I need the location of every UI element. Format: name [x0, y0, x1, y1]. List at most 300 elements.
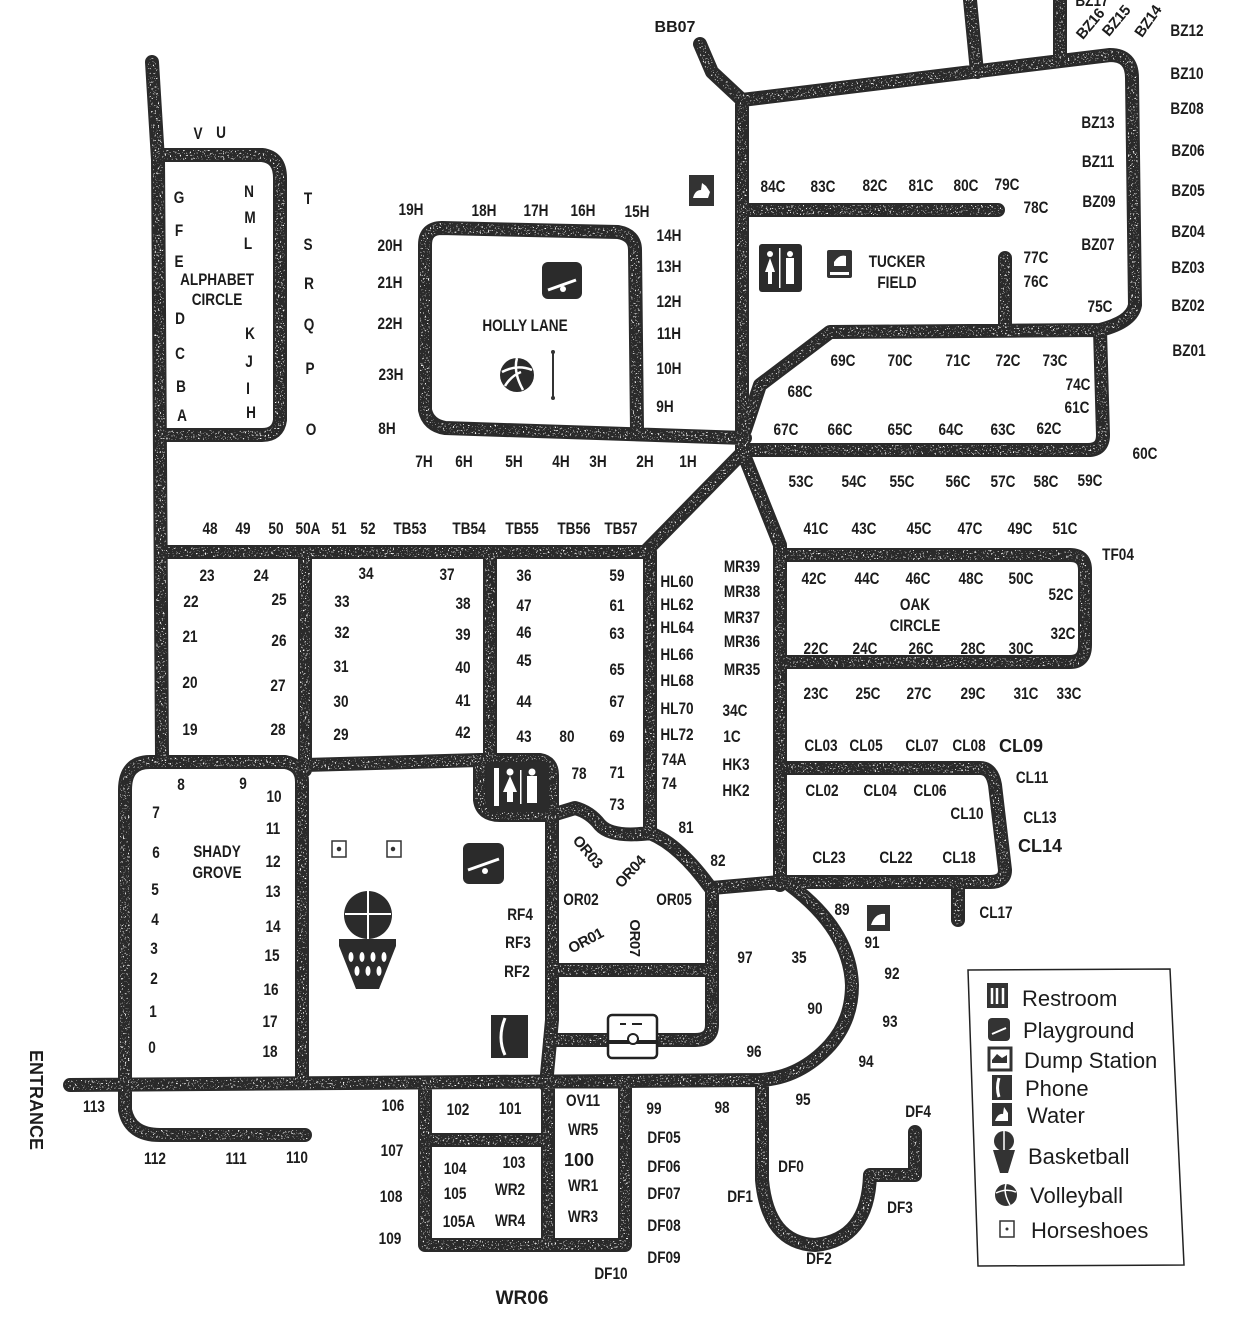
legend: playground: Playground [1023, 1018, 1134, 1043]
HL and MR labels: 82 [710, 852, 726, 870]
south labels: 111 [225, 1150, 247, 1168]
CL labels: CL05 [849, 737, 883, 755]
central row labels: 46 [516, 624, 532, 642]
top site labels: BZ04 [1171, 223, 1205, 241]
south labels: 100 [564, 1150, 594, 1170]
HL and MR labels: 1C [723, 728, 741, 746]
Holly Lane labels: 7H [415, 453, 433, 471]
Tucker Field labels: 82C [863, 177, 887, 195]
Alphabet Circle labels: ALPHABET [180, 271, 255, 289]
top site labels: BZ14 [1131, 1, 1166, 41]
east loop labels: 95 [795, 1091, 811, 1109]
Holly Lane labels: 6H [455, 453, 473, 471]
icon: water east [867, 905, 890, 931]
Shady Grove labels: 18 [262, 1043, 278, 1061]
CL labels: CL18 [942, 849, 976, 867]
Oak Circle labels: 33C [1057, 685, 1081, 703]
south labels: DF3 [887, 1199, 913, 1217]
Holly Lane labels: 14H [657, 227, 681, 245]
south labels: DF07 [647, 1185, 681, 1203]
top site labels [655, 0, 1206, 360]
Oak Circle labels: 32C [1051, 625, 1075, 643]
CL labels: CL03 [804, 737, 838, 755]
Tucker Field labels: FIELD [877, 274, 917, 292]
HL and MR labels: 81 [678, 819, 694, 837]
loop C labels: 59C [1078, 472, 1102, 490]
CL labels: CL10 [950, 805, 984, 823]
Alphabet Circle labels: E [174, 253, 184, 271]
central row labels: 80 [559, 728, 575, 746]
OR and RF labels: OR07 [626, 919, 643, 957]
Shady Grove labels: 7 [152, 804, 160, 822]
loop C labels: 53C [789, 473, 813, 491]
loop C labels: 71C [946, 352, 970, 370]
Alphabet Circle labels: N [244, 183, 254, 201]
CL labels: CL04 [863, 782, 897, 800]
CL labels: CL09 [999, 736, 1043, 756]
Holly Lane labels: 19H [399, 201, 423, 219]
central row labels: 42 [455, 724, 471, 742]
east loop labels: 93 [882, 1013, 898, 1031]
Holly Lane labels: 21H [378, 274, 402, 292]
central row labels: 47 [516, 597, 532, 615]
HL and MR labels: 74 [661, 775, 677, 793]
loop C labels: 62C [1037, 420, 1061, 438]
legend: dump station: Dump Station [1024, 1048, 1157, 1073]
Alphabet Circle labels: T [304, 190, 313, 208]
Holly Lane labels: 16H [571, 202, 595, 220]
Alphabet Circle labels: S [303, 236, 313, 254]
Oak Circle labels: 30C [1009, 640, 1033, 658]
central row labels: 51 [331, 520, 347, 538]
Holly Lane labels: 18H [472, 202, 496, 220]
loop C labels: 63C [991, 421, 1015, 439]
CL labels: CL08 [952, 737, 986, 755]
south labels: WR2 [495, 1181, 525, 1199]
Alphabet Circle labels: H [246, 404, 256, 422]
icon: volleyball and net [500, 350, 555, 400]
Shady Grove labels: 0 [148, 1039, 156, 1057]
central row labels: 67 [609, 693, 625, 711]
legend: phone: Phone [1025, 1076, 1089, 1101]
Shady Grove labels: 10 [266, 788, 282, 806]
south labels: WR3 [568, 1208, 598, 1226]
south labels: 99 [646, 1100, 662, 1118]
icon: dump station central [608, 1015, 657, 1058]
HL and MR labels: HL64 [660, 619, 694, 637]
icon: phone central [491, 1015, 528, 1058]
Alphabet Circle labels: CIRCLE [192, 291, 242, 309]
loop C labels: 55C [890, 473, 914, 491]
loop C labels: 56C [946, 473, 970, 491]
central row labels: 22 [183, 593, 199, 611]
central row labels: 38 [455, 595, 471, 613]
central row labels: 73 [609, 796, 625, 814]
Shady Grove labels: 6 [152, 844, 160, 862]
Shady Grove labels: 3 [150, 940, 158, 958]
loop C labels: 73C [1043, 352, 1067, 370]
east loop labels: 89 [834, 901, 850, 919]
Tucker Field labels: 76C [1024, 273, 1048, 291]
CL labels: CL22 [879, 849, 913, 867]
central row labels: 34 [358, 565, 374, 583]
central row labels: 26 [271, 632, 287, 650]
Oak Circle labels: 47C [958, 520, 982, 538]
south labels: OV11 [566, 1092, 600, 1110]
Holly Lane labels: 8H [378, 420, 396, 438]
OR and RF labels: OR03 [569, 832, 606, 872]
south labels: 108 [380, 1188, 403, 1206]
central row labels: 48 [202, 520, 218, 538]
south labels: 105 [444, 1185, 467, 1203]
central row labels: 43 [516, 728, 532, 746]
Holly Lane labels: 2H [636, 453, 654, 471]
loop C labels: 65C [888, 421, 912, 439]
Alphabet Circle labels: C [175, 345, 185, 363]
central row labels: 39 [455, 626, 471, 644]
HL and MR labels: MR39 [724, 558, 760, 576]
legend [968, 969, 1184, 1266]
HL and MR labels: HL68 [660, 672, 694, 690]
Shady Grove labels [148, 775, 282, 1061]
Shady Grove labels: 2 [150, 970, 158, 988]
Holly Lane labels: 3H [589, 453, 607, 471]
central row labels: 59 [609, 567, 625, 585]
Oak Circle labels: 51C [1053, 520, 1077, 538]
central row labels: 69 [609, 728, 625, 746]
Oak Circle labels: 44C [855, 570, 879, 588]
OR and RF labels: OR01 [565, 925, 606, 957]
loop C labels: 68C [788, 383, 812, 401]
Alphabet Circle labels: F [175, 222, 183, 240]
Oak Circle labels: 52C [1049, 586, 1073, 604]
central row labels: 49 [235, 520, 251, 538]
icon: water north [689, 175, 714, 206]
HL and MR labels: 34C [723, 702, 747, 720]
Oak Circle labels: 45C [907, 520, 931, 538]
south labels: WR06 [496, 1288, 548, 1309]
Oak Circle labels: 24C [853, 640, 877, 658]
legend: restroom: Restroom [1022, 986, 1117, 1011]
icon: dump station Tucker Field [827, 250, 852, 278]
loop C labels: 74C [1066, 376, 1090, 394]
south labels: DF05 [647, 1129, 681, 1147]
east loop labels: 90 [807, 1000, 823, 1018]
east loop labels: 97 [737, 949, 753, 967]
south labels [26, 1050, 931, 1309]
Oak Circle labels: 43C [852, 520, 876, 538]
Oak Circle labels: 42C [802, 570, 826, 588]
Holly Lane labels: 22H [378, 315, 402, 333]
south labels: 101 [499, 1100, 522, 1118]
Holly Lane labels: 13H [657, 258, 681, 276]
Shady Grove labels: 12 [265, 853, 281, 871]
east loop labels: 94 [858, 1053, 874, 1071]
Holly Lane labels: 15H [625, 203, 649, 221]
Alphabet Circle labels: U [216, 124, 226, 142]
loop C labels [774, 352, 1157, 491]
Tucker Field labels: 84C [761, 178, 785, 196]
icon: restroom Tucker Field [759, 244, 802, 292]
Shady Grove labels: 16 [263, 981, 279, 999]
Holly Lane labels: 1H [679, 453, 697, 471]
Oak Circle labels: 46C [906, 570, 930, 588]
central row labels: 23 [199, 567, 215, 585]
central row labels: TB56 [557, 520, 591, 538]
HL and MR labels: HL70 [660, 700, 694, 718]
central row labels: 63 [609, 625, 625, 643]
Oak Circle labels: 49C [1008, 520, 1032, 538]
central row labels: 52 [360, 520, 376, 538]
Shady Grove labels: 17 [262, 1013, 278, 1031]
central row labels: 61 [609, 597, 625, 615]
HL and MR labels: MR35 [724, 661, 761, 679]
Oak Circle labels: 29C [961, 685, 985, 703]
Oak Circle labels: 25C [856, 685, 880, 703]
Alphabet Circle labels: L [244, 235, 252, 253]
Holly Lane labels: 9H [656, 398, 674, 416]
central row labels: 20 [182, 674, 198, 692]
Tucker Field labels: 83C [811, 178, 835, 196]
loop C labels: 69C [831, 352, 855, 370]
Holly Lane labels [378, 201, 697, 471]
icon: playground central [463, 843, 504, 884]
legend: restroom [987, 983, 1117, 1011]
loop C labels: 58C [1034, 473, 1058, 491]
south labels: DF2 [806, 1250, 832, 1268]
Tucker Field labels: 81C [909, 177, 933, 195]
Oak Circle labels: OAK [900, 596, 930, 614]
south labels: DF09 [647, 1249, 681, 1267]
south labels: 104 [444, 1160, 467, 1178]
Alphabet Circle labels: P [305, 360, 315, 378]
south labels: 107 [381, 1142, 403, 1160]
Shady Grove labels: 4 [151, 911, 159, 929]
Holly Lane labels: 12H [657, 293, 681, 311]
Holly Lane labels: 11H [657, 325, 681, 343]
HL and MR labels: 74A [662, 751, 686, 769]
OR and RF labels: RF3 [505, 934, 531, 952]
CL labels: CL11 [1016, 769, 1049, 787]
top site labels: BZ09 [1082, 193, 1116, 211]
loop C labels: 54C [842, 473, 866, 491]
south labels: WR1 [568, 1177, 599, 1195]
south labels: 112 [144, 1150, 166, 1168]
top site labels: BZ06 [1171, 142, 1205, 160]
central row labels: 78 [571, 765, 587, 783]
central row labels: 50A [296, 520, 320, 538]
Alphabet Circle labels: M [244, 209, 256, 227]
top site labels: BB07 [655, 19, 696, 36]
top site labels: BZ01 [1172, 342, 1206, 360]
Oak Circle labels: 26C [909, 640, 933, 658]
Tucker Field labels: 79C [995, 176, 1019, 194]
HL and MR labels: HL72 [660, 726, 694, 744]
central row labels: 37 [439, 566, 455, 584]
Alphabet Circle labels: K [245, 325, 255, 343]
south labels: 105A [443, 1213, 475, 1231]
Oak Circle labels: 22C [804, 640, 828, 658]
Shady Grove labels: GROVE [192, 864, 242, 882]
legend: volleyball: Volleyball [1030, 1183, 1123, 1208]
loop C labels: 70C [888, 352, 912, 370]
central row labels: 29 [333, 726, 349, 744]
central row labels: TB53 [393, 520, 427, 538]
Oak Circle labels: 41C [804, 520, 828, 538]
legend: basketball: Basketball [1028, 1144, 1130, 1169]
south labels: DF10 [594, 1265, 628, 1283]
Alphabet Circle labels: I [246, 380, 250, 398]
OR and RF labels [504, 832, 692, 981]
Oak Circle labels: 27C [907, 685, 931, 703]
HL and MR labels: HK2 [722, 782, 750, 800]
legend: basketball [993, 1131, 1130, 1173]
south labels: DF4 [905, 1103, 931, 1121]
south labels: 113 [83, 1098, 105, 1116]
south labels: 109 [379, 1230, 401, 1248]
central row labels: 45 [516, 652, 532, 670]
top site labels: 75C [1088, 298, 1112, 316]
icon: basketball hoop [339, 891, 396, 989]
Oak Circle labels: 31C [1014, 685, 1038, 703]
central row labels: 50 [268, 520, 284, 538]
Tucker Field labels: 77C [1024, 249, 1048, 267]
Alphabet Circle labels: R [304, 275, 314, 293]
Alphabet Circle labels: B [176, 378, 186, 396]
Shady Grove labels: 11 [266, 820, 281, 838]
CL labels: CL23 [812, 849, 846, 867]
Alphabet Circle labels: D [175, 310, 185, 328]
HL and MR labels: HL66 [660, 646, 694, 664]
central row labels: 24 [253, 567, 269, 585]
central row labels [182, 520, 638, 814]
central row labels: 36 [516, 567, 532, 585]
central row labels: 28 [270, 721, 286, 739]
Shady Grove labels: 5 [151, 881, 159, 899]
loop C labels: 57C [991, 473, 1015, 491]
south labels: ENTRANCE [26, 1050, 46, 1150]
HL and MR labels [660, 558, 761, 870]
Holly Lane labels: 5H [505, 453, 523, 471]
south labels: 110 [286, 1149, 308, 1167]
Tucker Field labels: 80C [954, 177, 978, 195]
Holly Lane labels: 17H [524, 202, 548, 220]
icon: restroom central [487, 762, 549, 812]
central row labels: 65 [609, 661, 625, 679]
central row labels: 33 [334, 593, 350, 611]
loop C labels: 72C [996, 352, 1020, 370]
Alphabet Circle labels [174, 124, 316, 439]
central row labels: 32 [334, 624, 350, 642]
loop C labels: 64C [939, 421, 963, 439]
CL labels: CL02 [805, 782, 839, 800]
Shady Grove labels: 8 [177, 776, 185, 794]
central row labels: 19 [182, 721, 198, 739]
Shady Grove labels: 9 [239, 775, 247, 793]
Holly Lane labels: HOLLY LANE [482, 317, 568, 335]
top site labels: BZ13 [1081, 114, 1115, 132]
Alphabet Circle labels: G [174, 189, 184, 207]
loop C labels: 60C [1133, 445, 1157, 463]
top site labels: BZ12 [1170, 22, 1204, 40]
OR and RF labels: RF2 [504, 963, 530, 981]
Shady Grove labels: SHADY [193, 843, 241, 861]
CL labels: CL06 [913, 782, 947, 800]
Tucker Field labels: TUCKER [869, 253, 925, 271]
south labels: 102 [447, 1101, 469, 1119]
top site labels: BZ02 [1171, 297, 1205, 315]
central row labels: 31 [333, 658, 349, 676]
central row labels: TB57 [604, 520, 638, 538]
east loop labels [737, 901, 900, 1109]
east loop labels: 92 [884, 965, 900, 983]
CL labels [804, 736, 1062, 922]
legend: phone [992, 1075, 1089, 1101]
top site labels: BZ11 [1082, 153, 1115, 171]
Tucker Field labels: 78C [1024, 199, 1048, 217]
central row labels: 41 [455, 692, 471, 710]
HL and MR labels: MR38 [724, 583, 761, 601]
Alphabet Circle labels: J [245, 353, 253, 371]
CL labels: CL07 [905, 737, 939, 755]
south labels: WR5 [568, 1121, 599, 1139]
central row labels: TB55 [505, 520, 539, 538]
loop C labels: 66C [828, 421, 852, 439]
Shady Grove labels: 1 [149, 1003, 157, 1021]
Holly Lane labels: 4H [552, 453, 570, 471]
icon: playground Holly Lane [542, 262, 582, 299]
Tucker Field labels [761, 176, 1048, 292]
east loop labels: 35 [791, 949, 807, 967]
top site labels: BZ03 [1171, 259, 1205, 277]
CL labels: CL13 [1023, 809, 1057, 827]
Alphabet Circle labels: V [194, 125, 203, 143]
Oak Circle labels: TF04 [1102, 546, 1134, 564]
Holly Lane labels: 20H [378, 237, 402, 255]
legend: water [992, 1103, 1085, 1128]
south labels: DF0 [778, 1158, 804, 1176]
Oak Circle labels: 23C [804, 685, 828, 703]
south labels: 98 [714, 1099, 730, 1117]
top site labels: BZ08 [1170, 100, 1204, 118]
south labels: WR4 [495, 1212, 526, 1230]
OR and RF labels: OR02 [563, 891, 599, 909]
Shady Grove labels: 13 [265, 883, 281, 901]
east loop labels: 96 [746, 1043, 762, 1061]
Shady Grove labels: 14 [265, 918, 281, 936]
central row labels: 30 [333, 693, 349, 711]
Holly Lane labels: 23H [379, 366, 403, 384]
legend: horseshoes: Horseshoes [1031, 1218, 1148, 1243]
top site labels: BZ10 [1170, 65, 1204, 83]
top site labels: BZ16 [1073, 5, 1108, 43]
central row labels: TB54 [452, 520, 486, 538]
HL and MR labels: MR37 [724, 609, 760, 627]
HL and MR labels: HK3 [722, 756, 750, 774]
Holly Lane labels: 10H [657, 360, 681, 378]
top site labels: BZ07 [1081, 236, 1115, 254]
loop C labels: 67C [774, 421, 798, 439]
Oak Circle labels: 48C [959, 570, 983, 588]
central row labels: 44 [516, 693, 532, 711]
central row labels: 40 [455, 659, 471, 677]
Oak Circle labels: CIRCLE [890, 617, 940, 635]
Alphabet Circle labels: Q [304, 316, 314, 334]
Shady Grove labels: 15 [264, 947, 280, 965]
OR and RF labels: RF4 [507, 906, 533, 924]
HL and MR labels: MR36 [724, 633, 760, 651]
Oak Circle labels: 50C [1009, 570, 1033, 588]
